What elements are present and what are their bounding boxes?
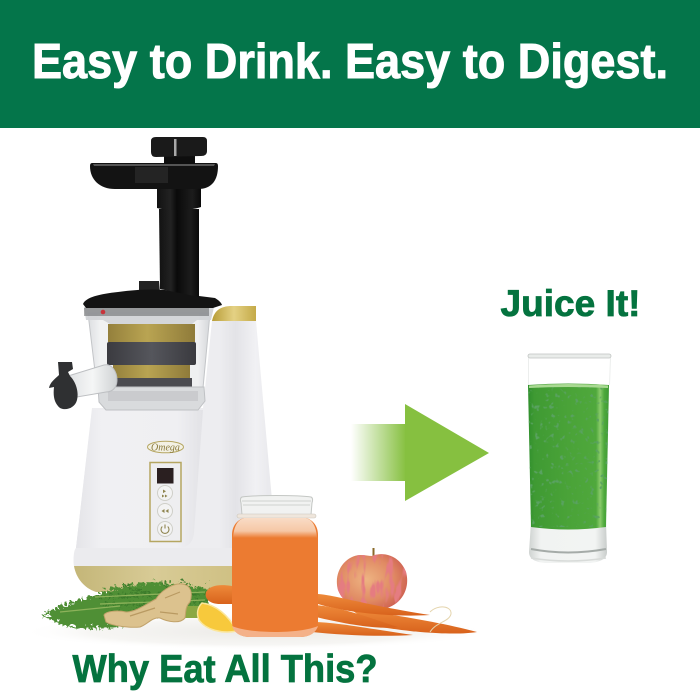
gold strainer bottom bbox=[113, 365, 190, 379]
juice texture bbox=[528, 387, 609, 527]
clear juicing bowl bbox=[88, 313, 210, 388]
glass of green juice bbox=[525, 354, 615, 563]
body shell bbox=[74, 321, 276, 566]
chute collar bbox=[157, 187, 201, 210]
button: power bbox=[158, 522, 172, 536]
carrot stems bbox=[60, 592, 205, 612]
heading: why eat all this: Why Eat All This? bbox=[72, 648, 378, 691]
button: reverse bbox=[158, 504, 172, 518]
Omega logo: Omega bbox=[151, 442, 180, 454]
front panel bbox=[76, 410, 203, 548]
right carrots bbox=[312, 594, 477, 636]
jar lid rim bbox=[240, 496, 313, 515]
arrow tail bbox=[351, 424, 406, 481]
feed chute bbox=[159, 209, 199, 297]
floor reflection bbox=[20, 614, 490, 650]
display bbox=[157, 468, 174, 484]
lid clip bbox=[139, 281, 160, 293]
control panel bbox=[150, 462, 181, 542]
apple bbox=[336, 548, 408, 608]
food tray bbox=[90, 163, 218, 189]
heading: juice it: Juice It! bbox=[500, 282, 640, 324]
black spout cap bbox=[49, 362, 78, 409]
button: play bbox=[158, 486, 172, 500]
lid bbox=[83, 289, 222, 308]
juicer bbox=[49, 137, 276, 592]
bowl collar bbox=[84, 307, 214, 324]
dark strainer foot bbox=[112, 378, 192, 389]
carrot tops bbox=[40, 579, 207, 626]
greens and produce bbox=[40, 548, 477, 636]
gold strainer top bbox=[108, 324, 195, 342]
glass rim bbox=[528, 354, 611, 358]
lemon bbox=[198, 603, 237, 632]
pusher knob bbox=[151, 137, 207, 157]
arrow head bbox=[405, 404, 489, 501]
jar body bbox=[232, 518, 318, 637]
gold base bbox=[74, 566, 236, 592]
jar of carrot juice bbox=[232, 496, 318, 637]
ginger bbox=[104, 584, 191, 627]
clear spout bbox=[68, 365, 117, 397]
arrow bbox=[351, 404, 489, 501]
gold cap bbox=[212, 306, 256, 321]
dark strainer band bbox=[107, 342, 196, 365]
jar foam bbox=[233, 518, 317, 538]
glass base bbox=[529, 522, 607, 563]
clear bowl base bbox=[98, 387, 205, 410]
pusher stem bbox=[164, 156, 195, 164]
green juice bbox=[528, 384, 609, 530]
header banner bbox=[0, 0, 700, 128]
left carrot bbox=[206, 585, 232, 604]
jar bottom glass bbox=[232, 626, 318, 637]
foot lip bbox=[74, 548, 240, 566]
